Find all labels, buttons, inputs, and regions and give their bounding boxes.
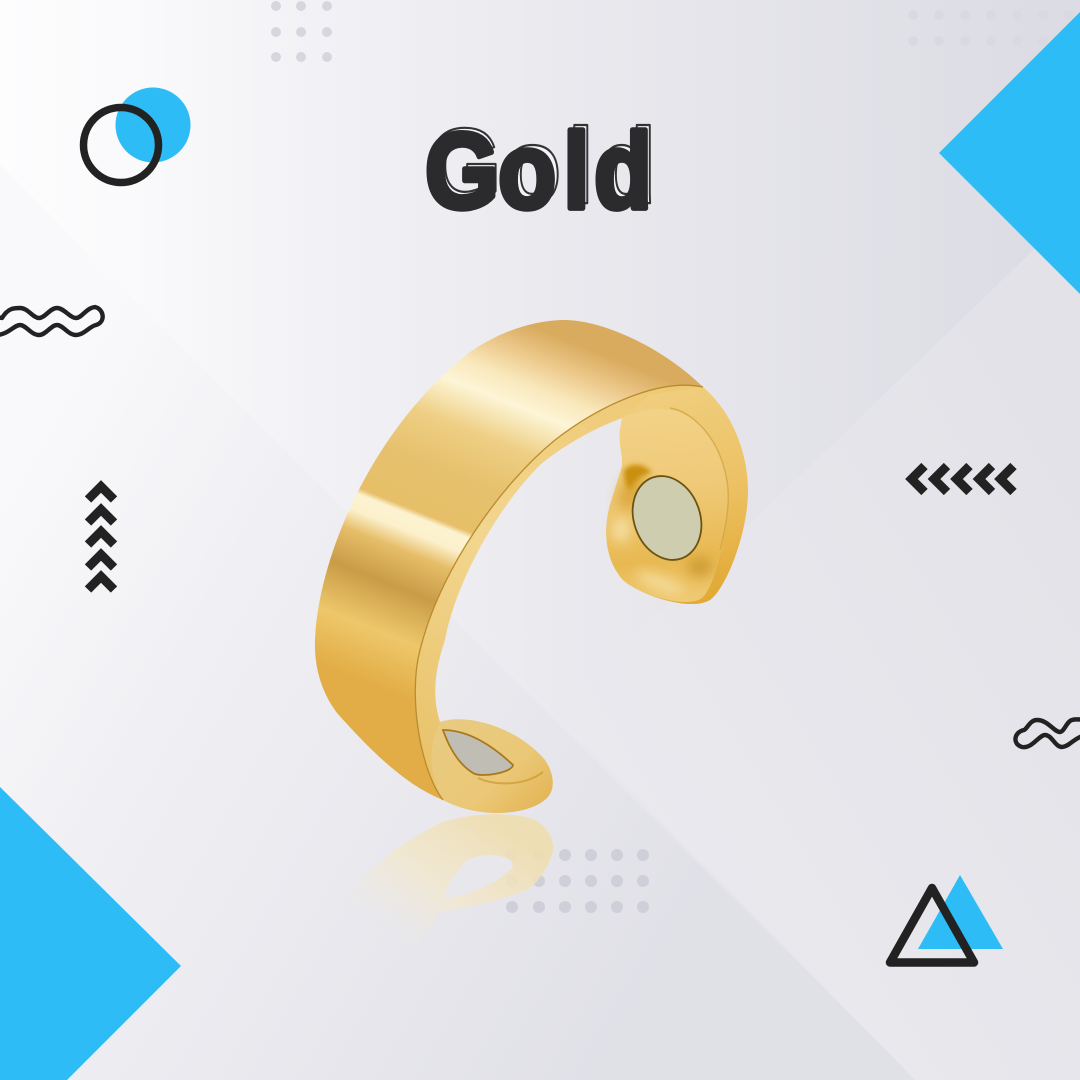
icon: overlapping circles xyxy=(84,88,190,182)
gold ring xyxy=(315,320,748,813)
title: Gold xyxy=(425,110,652,231)
title: Gold xyxy=(428,105,656,226)
dot grid: bottom xyxy=(506,849,649,913)
icon: wave left xyxy=(0,307,103,335)
icon: left chevrons xyxy=(912,466,1014,492)
ring inside right end xyxy=(606,385,748,604)
icon: up chevrons xyxy=(88,486,114,590)
ring tip lower xyxy=(431,719,553,813)
icon: overlapping triangles xyxy=(890,875,1003,962)
dot grid: top xyxy=(271,1,332,62)
ring reflection xyxy=(328,814,553,948)
ring rim edge xyxy=(415,385,703,813)
blue triangle: bottom left xyxy=(0,787,181,1080)
blue triangle: top right xyxy=(939,12,1080,294)
ring band outer xyxy=(315,320,703,800)
icon: wave right xyxy=(1015,719,1080,747)
dot grid: top right xyxy=(908,10,1074,46)
